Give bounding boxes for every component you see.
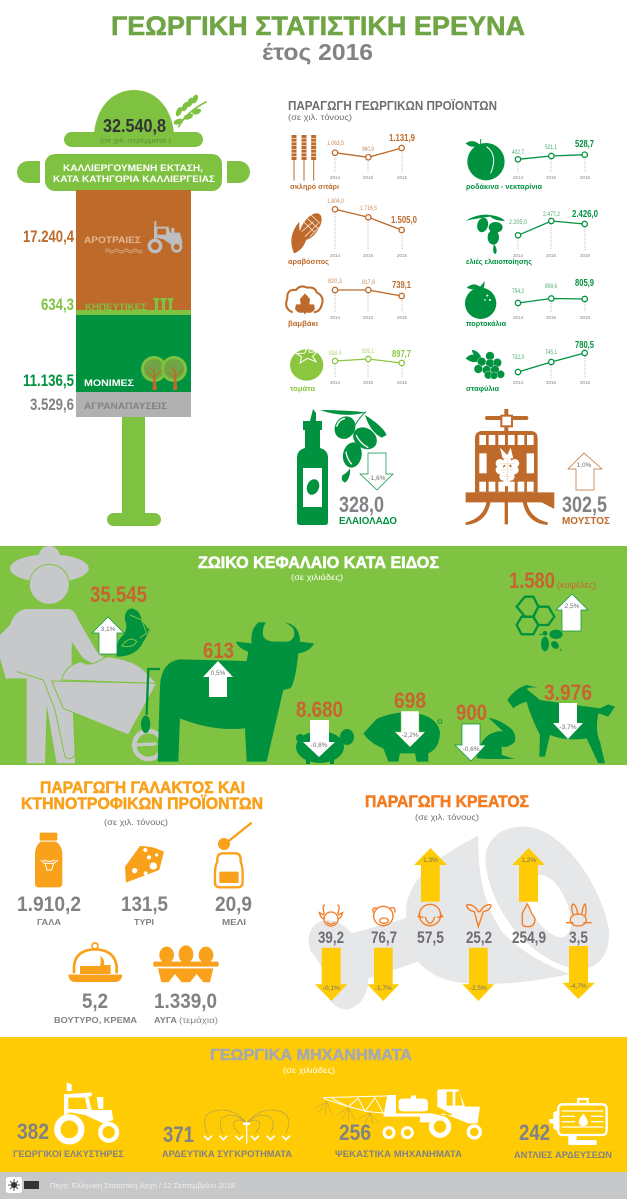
- icon: honey jar: [215, 823, 252, 887]
- heading: crop production: ΠΑΡΑΓΩΓΗ ΓΕΩΡΓΙΚΩΝ ΠΡΟΪΟΝΤΩΝ: [288, 98, 497, 113]
- chart: grapes: 2015: [546, 380, 557, 385]
- icon: cotton: [286, 286, 323, 314]
- sign dome with total: [64, 90, 203, 147]
- heading: [365, 793, 529, 822]
- panel: agricultural machinery: ΑΡΔΕΥΤΙΚΑ ΣΥΓΚΡΟΤΗΜΑΤΑ: [162, 1149, 292, 1160]
- icon: goat head: [467, 905, 491, 927]
- icon: egg carton: [153, 945, 219, 982]
- panel: milk and animal products: ΜΕΛΙ: [222, 917, 246, 927]
- chart: grapes: 2014: [513, 380, 524, 385]
- arrow: poultry meat up: 1,2%: [521, 857, 536, 864]
- panel: agricultural machinery: 256: [339, 1120, 371, 1145]
- icon: cow: [141, 622, 314, 762]
- panel: olive oil: ΕΛΑΙΟΛΑΔΟ: [339, 516, 397, 527]
- chart: cotton: 820,3: [328, 278, 342, 285]
- panel: meat production: 39,2: [318, 929, 344, 947]
- stacked bar: fallow: 3.529,6: [30, 395, 74, 414]
- icon: wine press: [466, 409, 554, 525]
- chart: oranges: 2016: [580, 315, 591, 320]
- stacked bar: vegetables: 634,3: [41, 295, 74, 314]
- arrow: sheep meat up: [414, 848, 447, 902]
- chart: durum wheat: 1.063,5: [327, 140, 344, 147]
- panel: agricultural machinery: 242: [519, 1120, 550, 1145]
- chart: table olives for oil: 2.426,0: [572, 209, 598, 220]
- arrow: goats down: -3,7%: [560, 724, 577, 731]
- chart: table olives for oil: 2.477,2: [543, 211, 560, 218]
- panel: meat production: [308, 793, 609, 1010]
- panel: meat production: 25,2: [466, 929, 492, 947]
- chart: table olives for oil: 2016: [580, 253, 591, 258]
- chart: peaches: 2014: [513, 175, 524, 180]
- panel: livestock: [0, 546, 627, 765]
- chart: oranges: 754,2: [512, 288, 524, 295]
- chart: tomato: 926,1: [362, 348, 374, 355]
- arrow: goat meat down: -2,5%: [470, 985, 487, 992]
- chart: cotton: 817,6: [362, 279, 375, 286]
- heading: ΚΤΗΝΟΤΡΟΦΙΚΩΝ ΠΡΟΪΟΝΤΩΝ: [21, 795, 263, 813]
- icon: tractor: [105, 221, 183, 253]
- title: ΓΕΩΡΓΙΚΗ ΣΤΑΤΙΣΤΙΚΗ ΕΡΕΥΝΑ: [111, 11, 525, 41]
- panel: agricultural machinery: ΑΝΤΛΙΕΣ ΑΡΔΕΥΣΕΩΝ: [514, 1150, 612, 1161]
- icon: butter dish: [68, 943, 122, 982]
- chart: oranges: 2014: [513, 315, 524, 320]
- heading box: ΚΑΛΛΙΕΡΓΟΥΜΕΝΗ ΕΚΤΑΣΗ,: [63, 163, 203, 174]
- icon: peach: [466, 139, 505, 180]
- stacked bar: vegetables: [41, 295, 191, 315]
- arrow: must up: [568, 453, 602, 490]
- icon: grapes: [466, 350, 505, 379]
- chart: cotton: [286, 278, 411, 328]
- chart: tomato: 2016: [397, 380, 408, 385]
- arrow: sheep meat up: 1,3%: [423, 857, 438, 864]
- chart: oranges: 2015: [546, 315, 557, 320]
- stacked bar: permanent crops: ΜΟΝΙΜΕΣ: [84, 378, 134, 389]
- illustration: farmer with wheelbarrow: [0, 546, 162, 763]
- arrow: poultry meat up: [512, 848, 545, 902]
- chart: tomato: 2014: [330, 380, 341, 385]
- chart: grapes: 745,1: [545, 349, 557, 356]
- chart: oranges: [465, 278, 594, 328]
- icon: sprayer: [314, 1089, 480, 1138]
- panel: agricultural machinery: ΓΕΩΡΓΙΚΟΙ ΕΛΚΥΣΤΗΡΕΣ: [13, 1149, 124, 1160]
- arrow: poultry up: [92, 617, 124, 654]
- chart: cotton: 2016: [397, 315, 408, 320]
- chart: tomato: [290, 347, 411, 393]
- icon: tractor: [57, 1082, 117, 1141]
- icon: hen: [116, 608, 151, 657]
- icon: seedlings: [153, 298, 174, 310]
- panel: grape must: [466, 409, 610, 527]
- icon: olive branch: [320, 410, 387, 483]
- chart: grapes: [466, 340, 594, 393]
- panel: livestock: 900: [456, 700, 487, 725]
- chart: maize: 1.804,0: [327, 198, 344, 205]
- arrow: pig down: -2,2%: [402, 732, 419, 739]
- panel: milk and animal products: ΓΑΛΑ: [37, 917, 61, 927]
- arrow: rabbit down: -0,6%: [463, 746, 480, 753]
- heading: ΖΩΙΚΟ ΚΕΦΑΛΑΙΟ ΚΑΤΑ ΕΙΔΟΣ: [198, 554, 439, 572]
- stacked bar: arable: 17.240,4: [23, 227, 74, 246]
- panel: agricultural machinery: ΨΕΚΑΣΤΙΚΑ ΜΗΧΑΝΗΜΑΤΑ: [335, 1149, 462, 1160]
- arrow: must up: 1,0%: [577, 462, 592, 469]
- chart: cotton: βαμβάκι: [288, 319, 318, 328]
- panel: milk and animal products: ΑΥΓΑ: [154, 1015, 177, 1025]
- chart: table olives for oil: 2015: [546, 253, 557, 258]
- panel: livestock: 8.680: [296, 697, 343, 722]
- icon: sheep: [296, 729, 354, 764]
- panel: milk and animal products: 20,9: [215, 893, 252, 916]
- icon: milk bottle: [35, 833, 62, 887]
- icon: rabbit head: [566, 904, 592, 926]
- panel: agricultural machinery: 371: [163, 1122, 194, 1147]
- panel: grape must: ΜΟΥΣΤΟΣ: [562, 516, 610, 527]
- footer: [0, 1172, 627, 1199]
- title: [111, 11, 525, 65]
- arrow: beehives up: [556, 594, 588, 631]
- chart: durum wheat: 2015: [363, 175, 374, 180]
- arrow: pork down: -1,7%: [375, 985, 392, 992]
- arrow: rabbit meat down: [562, 946, 595, 999]
- icon: two trees: [141, 356, 187, 390]
- chart: table olives for oil: ελιές ελαιοποίησης: [466, 257, 532, 266]
- arrow: goat meat down: [462, 948, 494, 1001]
- panel: livestock: 1.580: [509, 568, 555, 593]
- chart: tomato: 897,7: [392, 349, 411, 360]
- heading: (σε χιλ. τόνους): [104, 818, 168, 827]
- arrow: beef down: [315, 948, 347, 1001]
- stacked bar: fallow: ΑΓΡΑΝΑΠΑΥΣΕΙΣ: [84, 401, 167, 412]
- sign dome with total: 32.540,8: [103, 115, 166, 136]
- stacked bar: arable: ΑΡΟΤΡΑΙΕΣ: [84, 235, 141, 246]
- stacked bar: fallow: [30, 392, 191, 417]
- sign dome with total: (σε χιλ. στρέμματα ): [100, 136, 171, 144]
- heading: crop production: (σε χιλ. τόνους): [288, 113, 352, 122]
- chart: peaches: 2016: [580, 175, 591, 180]
- heading: [198, 554, 439, 582]
- chart: tomato: τομάτα: [290, 384, 315, 393]
- chart: oranges: πορτοκάλια: [466, 319, 506, 328]
- panel: milk and animal products: ΒΟΥΤΥΡΟ, ΚΡΕΜΑ: [54, 1015, 137, 1025]
- panel: olive oil: [297, 409, 397, 527]
- chart: tomato: 918,4: [329, 350, 341, 357]
- chart: grapes: 2016: [580, 380, 591, 385]
- chart: peaches: [466, 139, 594, 191]
- arrow: sheep down: -0,8%: [311, 742, 328, 749]
- chart: tomato: 2015: [363, 380, 374, 385]
- chart: maize: 2015: [363, 253, 374, 258]
- icon: irrigation pump: [549, 1099, 607, 1145]
- heading: (σε χιλ. τόνους): [415, 813, 479, 822]
- chart: maize: 2014: [330, 253, 341, 258]
- chart: table olives for oil: 2014: [513, 253, 524, 258]
- chart: grapes: σταφύλια: [466, 384, 499, 393]
- title: έτος 2016: [262, 39, 373, 65]
- panel: milk and animal products: 1.910,2: [17, 893, 81, 916]
- icon: corn: [291, 210, 326, 253]
- heading box: ΚΑΤΑ ΚΑΤΗΓΟΡΙΑ ΚΑΛΛΙΕΡΓΕΙΑΣ: [53, 174, 215, 185]
- arrow: pig down: [395, 711, 425, 747]
- icon: hen head: [522, 904, 535, 927]
- icon: oil bottle: [297, 409, 328, 525]
- icon: goat: [507, 685, 615, 763]
- arrow: beef down: -0,1%: [323, 985, 340, 992]
- arrow: poultry up: 3,1%: [101, 626, 116, 633]
- panel: agricultural machinery: [0, 1037, 627, 1172]
- icon: sheep head: [418, 904, 443, 926]
- panel: milk and animal products: 5,2: [82, 990, 108, 1013]
- arrow: pork down: [367, 948, 399, 1001]
- footer: Πηγή: Ελληνική Στατιστική Αρχή / 12 Σεπτεμβρίου 2018: [50, 1181, 235, 1190]
- panel: milk and animal products: ΤΥΡΙ: [134, 917, 154, 927]
- panel: livestock: 3.976: [544, 680, 592, 705]
- panel: livestock: (κυψέλες): [557, 580, 596, 590]
- panel: livestock: 698: [394, 688, 426, 713]
- panel: cultivated area sign: [17, 90, 250, 526]
- icon: wheat: [294, 135, 314, 181]
- chart: peaches: ροδάκινα - νεκταρίνια: [466, 182, 542, 191]
- chart: maize: 1.716,5: [360, 205, 377, 212]
- chart: maize: 1.505,0: [391, 215, 417, 226]
- icon: pig head: [373, 906, 395, 926]
- panel: milk and animal products: (τεμάχια): [179, 1016, 218, 1025]
- chart: peaches: 521,1: [545, 144, 557, 151]
- stacked bar: permanent crops: 11.136,5: [23, 371, 74, 390]
- arrow: olive oil down: -1,6%: [369, 475, 386, 482]
- panel: milk and animal products: 1.339,0: [154, 990, 217, 1013]
- chart: grapes: 780,5: [575, 340, 594, 351]
- heading: ΠΑΡΑΓΩΓΗ ΚΡΕΑΤΟΣ: [365, 793, 529, 811]
- icon: orange: [465, 281, 496, 319]
- chart: oranges: 805,9: [575, 278, 594, 289]
- chart: durum wheat: [290, 133, 415, 191]
- chart: cotton: 739,1: [392, 280, 411, 291]
- chart: durum wheat: 2016: [397, 175, 408, 180]
- chart: maize: 2016: [397, 253, 408, 258]
- icon: pig: [363, 712, 442, 762]
- chart: durum wheat: 960,9: [362, 146, 374, 153]
- chart: table olives for oil: 2.205,0: [509, 219, 527, 226]
- panel: meat production: 3,5: [569, 929, 588, 947]
- panel: grape must: 302,5: [562, 492, 607, 517]
- panel: livestock: 613: [203, 638, 234, 663]
- chart: oranges: 808,6: [545, 283, 557, 290]
- arrow: rabbit meat down: -4,7%: [570, 983, 587, 990]
- chart: peaches: 402,7: [512, 149, 524, 156]
- panel: milk and animal products: 131,5: [121, 893, 168, 916]
- chart: maize: αραβόσιτος: [288, 257, 329, 266]
- icon: wheat sprig: [173, 94, 207, 127]
- chart: cotton: 2014: [330, 315, 341, 320]
- icon: rabbit: [477, 718, 515, 759]
- icon: olives: [466, 215, 505, 254]
- heading: ΠΑΡΑΓΩΓΗ ΓΑΛΑΚΤΟΣ ΚΑΙ: [40, 779, 245, 797]
- icon: honeycomb and bee: [517, 597, 563, 651]
- heading: [210, 1047, 412, 1075]
- sign post: [107, 417, 161, 526]
- chart: maize: [288, 198, 417, 266]
- panel: olive oil: 328,0: [339, 492, 384, 517]
- arrow: cattle up: 0,5%: [211, 670, 226, 677]
- arrow: beehives up: 2,5%: [565, 603, 580, 610]
- icon: cheese: [125, 846, 164, 883]
- chart: table olives for oil: [466, 209, 598, 266]
- stacked bar: arable: [23, 190, 191, 310]
- arrow: sheep down: [303, 720, 335, 757]
- chart: durum wheat: 1.131,9: [389, 133, 415, 144]
- icon: irrigation sprinkler: [204, 1110, 290, 1144]
- arrow: rabbit down: [455, 724, 486, 761]
- stacked bar: vegetables: ΚΗΠΕΥΤΙΚΕΣ: [85, 302, 147, 313]
- heading: [21, 779, 263, 827]
- arrow: cattle up: [203, 661, 233, 697]
- icon: cow head: [319, 905, 343, 926]
- heading: (σε χιλιάδες): [291, 573, 343, 582]
- panel: meat production: 76,7: [371, 929, 397, 947]
- heading: crop production: [288, 98, 497, 122]
- chart: cotton: 2015: [363, 315, 374, 320]
- panel: meat production: 57,5: [417, 929, 444, 947]
- panel: livestock: 35.545: [90, 582, 147, 607]
- panel: milk and animal products: [17, 779, 263, 1025]
- panel: meat production: 254,9: [512, 929, 546, 947]
- stacked bar: permanent crops: [23, 315, 191, 392]
- icons: meat animals: [319, 904, 592, 927]
- heading box: [17, 154, 250, 191]
- heading: ΓΕΩΡΓΙΚΑ ΜΗΧΑΝΗΜΑΤΑ: [210, 1047, 412, 1064]
- logo: [6, 1177, 39, 1193]
- icon: tomato: [290, 347, 323, 381]
- panel: agricultural machinery: 382: [17, 1119, 49, 1144]
- heading: (σε χιλιάδες): [283, 1066, 335, 1075]
- arrow: goats down: [553, 703, 583, 739]
- chart: peaches: 528,7: [575, 139, 594, 150]
- illustration: meat cut background: [308, 827, 609, 1010]
- chart: durum wheat: σκληρό σιτάρι: [290, 182, 339, 191]
- chart: durum wheat: 2014: [330, 175, 341, 180]
- chart: grapes: 732,3: [512, 354, 524, 361]
- chart: peaches: 2015: [546, 175, 557, 180]
